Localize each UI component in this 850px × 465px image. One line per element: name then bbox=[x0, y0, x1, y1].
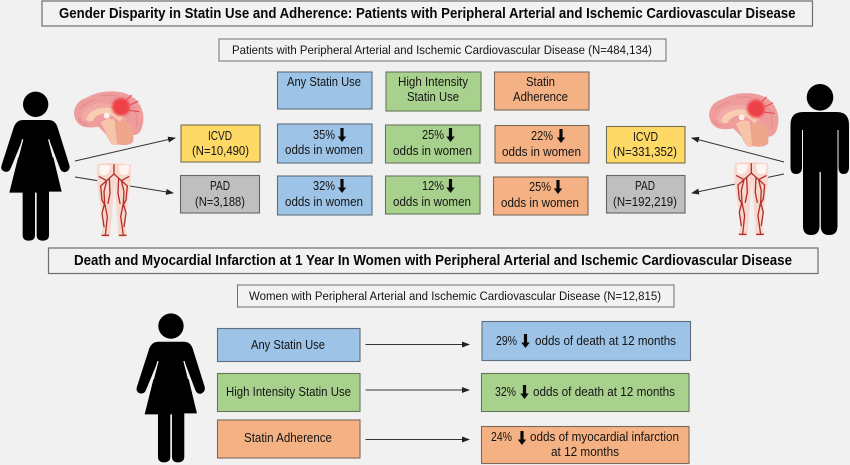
box: ICVD women: (N=10,490) bbox=[192, 143, 249, 158]
arrow: adherence to infarction odds bbox=[366, 438, 469, 440]
outcome: 29% death: odds of death at 12 months bbox=[535, 333, 676, 348]
outcome: 24% myocardial infarction bbox=[482, 426, 689, 464]
arrow: high intensity to death odds bbox=[366, 389, 469, 391]
stat: 12% PAD bbox=[386, 176, 480, 214]
stat: 25% PAD bbox=[494, 177, 588, 215]
stat: 22% ICVD: 22% bbox=[531, 128, 553, 143]
arrow: man to ICVD bbox=[692, 138, 784, 162]
stat: 32% PAD bbox=[278, 176, 372, 215]
stat: 25% ICVD bbox=[386, 125, 480, 163]
icon: man bbox=[790, 84, 849, 235]
box: PAD men bbox=[606, 176, 685, 213]
icon: brain, left bbox=[74, 91, 143, 145]
subtitle: women population: Women with Peripheral Arterial and Ischemic Cardiovascular Disease (N=12,815) bbox=[249, 289, 661, 303]
header: statin adherence bbox=[494, 72, 589, 110]
header: statin adherence: Statin bbox=[526, 74, 555, 89]
panel: statin adherence column bbox=[494, 72, 589, 215]
stat: 22% ICVD: odds in women bbox=[502, 144, 581, 159]
icon: leg arteries, left bbox=[97, 163, 131, 237]
header: high intensity statin use: Statin Use bbox=[407, 89, 459, 104]
outcome: 32% death bbox=[482, 374, 689, 412]
box: PAD women: (N=3,188) bbox=[195, 194, 245, 209]
stat: 12% PAD: 12% bbox=[422, 178, 444, 193]
header: statin adherence: Adherence bbox=[513, 89, 568, 104]
icon: brain, right bbox=[709, 93, 778, 147]
subtitle: patient population bbox=[219, 39, 666, 61]
stat: 35% ICVD bbox=[278, 124, 372, 163]
box: ICVD men: ICVD bbox=[633, 129, 658, 144]
stat: 22% ICVD bbox=[495, 126, 589, 163]
subtitle: patient population: Patients with Peripheral Arterial and Ischemic Cardiovascular Disease (N=484,134) bbox=[232, 43, 652, 57]
header: high intensity statin use bbox=[386, 72, 481, 111]
box: high intensity statin use bbox=[218, 374, 360, 412]
box: PAD men: PAD bbox=[635, 178, 655, 193]
arrow: man to PAD bbox=[692, 174, 784, 193]
box: ICVD men: (N=331,352) bbox=[613, 144, 677, 159]
stat: 32% PAD: odds in women bbox=[285, 194, 363, 209]
panel: high intensity statin use column bbox=[386, 72, 481, 214]
title: gender disparity bbox=[42, 1, 812, 26]
box: statin adherence: Statin Adherence bbox=[244, 430, 332, 445]
box: PAD men: (N=192,219) bbox=[613, 194, 677, 209]
title: death and myocardial infarction bbox=[48, 248, 818, 274]
box: ICVD men bbox=[606, 126, 685, 163]
stat: 35% ICVD: 35% bbox=[313, 127, 335, 142]
arrow: woman to PAD bbox=[75, 177, 173, 193]
outcome: 32% death: 32% bbox=[495, 384, 516, 399]
header: any statin use bbox=[278, 72, 372, 109]
icon: woman, lower bbox=[137, 313, 205, 462]
box: any statin use: Any Statin Use bbox=[251, 337, 325, 352]
outcome: 24% myocardial infarction: odds of myocardial infarction bbox=[530, 429, 679, 444]
stat: 25% ICVD: odds in women bbox=[393, 143, 472, 158]
box: high intensity statin use: High Intensity Statin Use bbox=[226, 384, 351, 399]
header: any statin use: Any Statin Use bbox=[287, 74, 361, 89]
outcome: 32% death: odds of death at 12 months bbox=[533, 384, 675, 399]
outcome: 29% death bbox=[482, 322, 690, 360]
box: ICVD women bbox=[181, 125, 260, 162]
stat: 25% ICVD: 25% bbox=[422, 127, 444, 142]
header: high intensity statin use: High Intensity bbox=[398, 74, 469, 89]
icon: woman bbox=[1, 92, 70, 241]
box: any statin use bbox=[218, 328, 360, 362]
panel: any statin use column bbox=[278, 72, 372, 215]
box: ICVD women: ICVD bbox=[208, 128, 232, 143]
outcome: 29% death: 29% bbox=[496, 333, 517, 348]
arrow: any statin use to death odds bbox=[366, 344, 469, 346]
stat: 12% PAD: odds in women bbox=[393, 194, 471, 209]
box: PAD women: PAD bbox=[210, 178, 230, 193]
arrow: woman to ICVD bbox=[75, 138, 175, 161]
stat: 32% PAD: 32% bbox=[313, 178, 335, 193]
box: statin adherence bbox=[218, 420, 360, 458]
box: PAD women bbox=[180, 176, 260, 213]
icon: leg arteries, right bbox=[734, 162, 768, 236]
stat: 25% PAD: 25% bbox=[529, 179, 551, 194]
subtitle: women population bbox=[238, 285, 674, 307]
stat: 35% ICVD: odds in women bbox=[285, 142, 363, 157]
outcome: 24% myocardial infarction: at 12 months bbox=[551, 444, 619, 459]
outcome: 24% myocardial infarction: 24% bbox=[491, 429, 512, 444]
stat: 25% PAD: odds in women bbox=[501, 195, 579, 210]
